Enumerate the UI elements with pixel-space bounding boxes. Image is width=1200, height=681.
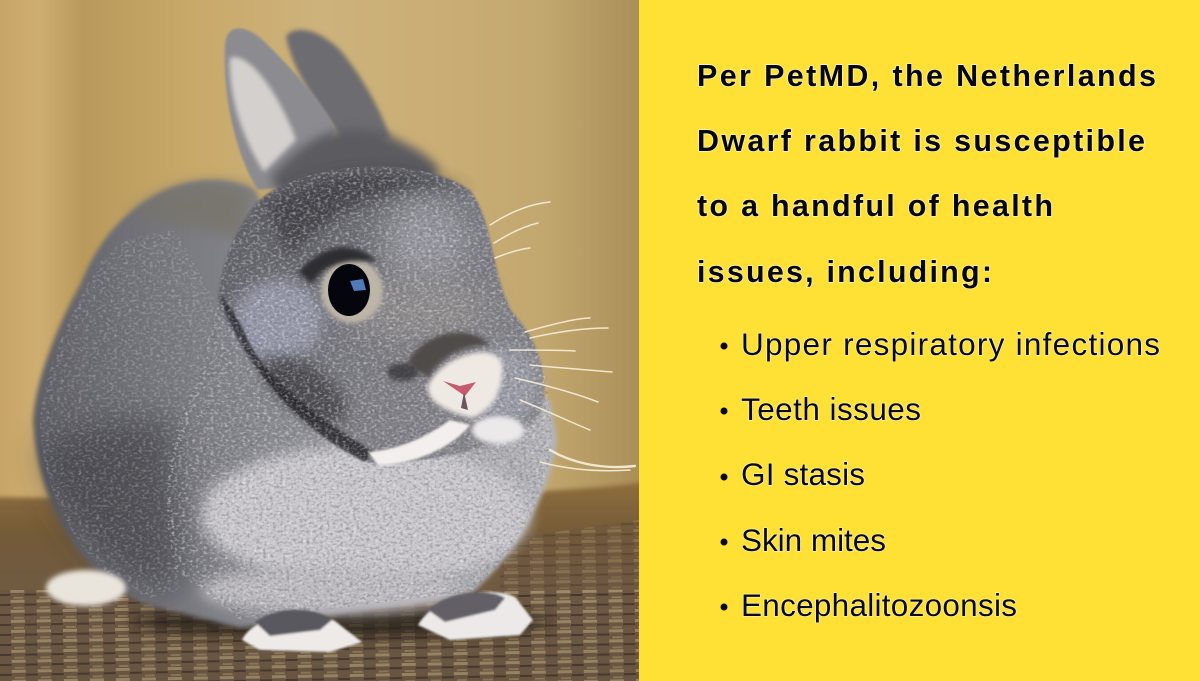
bullet: encephalitozoonsis: Encephalitozoonsis — [741, 587, 1017, 623]
blurred rear — [130, 182, 255, 240]
forehead highlight — [383, 198, 467, 282]
inner ear — [230, 57, 296, 172]
woven floor mat — [0, 480, 660, 681]
neck — [268, 126, 444, 190]
chest fur — [200, 445, 530, 585]
rabbit body — [33, 180, 557, 628]
bullet: upper respiratory infections: Upper respiratory infections — [741, 326, 1160, 362]
bullet list — [720, 326, 1160, 623]
heading: Dwarf rabbit is susceptible — [697, 124, 1145, 158]
heading: issues, including: — [697, 255, 992, 289]
rabbit — [30, 28, 635, 652]
heading: Per PetMD, the Netherlands — [697, 59, 1156, 93]
snout highlight — [350, 280, 490, 340]
head — [218, 166, 544, 464]
heading: to a handful of health — [697, 189, 1053, 223]
dark lower cheek — [258, 348, 352, 428]
heading — [697, 59, 1156, 289]
fur texture dark — [168, 169, 552, 618]
belly fur — [200, 566, 460, 614]
dark body shading — [40, 419, 182, 595]
body fur texture dark — [51, 236, 213, 594]
brow shading — [265, 171, 470, 260]
cheek highlight — [234, 280, 322, 360]
bullet: GI stasis: GI stasis — [741, 456, 865, 492]
rabbit shadow — [130, 606, 550, 638]
muzzle — [368, 332, 524, 465]
front ear — [225, 28, 336, 190]
front paws — [46, 570, 533, 652]
wall background — [0, 0, 639, 510]
back ear — [286, 30, 390, 150]
whiskers — [490, 202, 635, 471]
fur texture light — [167, 166, 552, 620]
bullet: skin mites: Skin mites — [741, 522, 886, 558]
bullet: teeth issues: Teeth issues — [741, 391, 921, 427]
right cheek — [471, 347, 539, 423]
body fur texture light — [40, 230, 214, 598]
eye — [298, 247, 383, 323]
dark cheek rim — [220, 295, 374, 462]
panel: rabbit photo — [0, 0, 660, 681]
panel: yellow text panel — [639, 0, 1200, 681]
